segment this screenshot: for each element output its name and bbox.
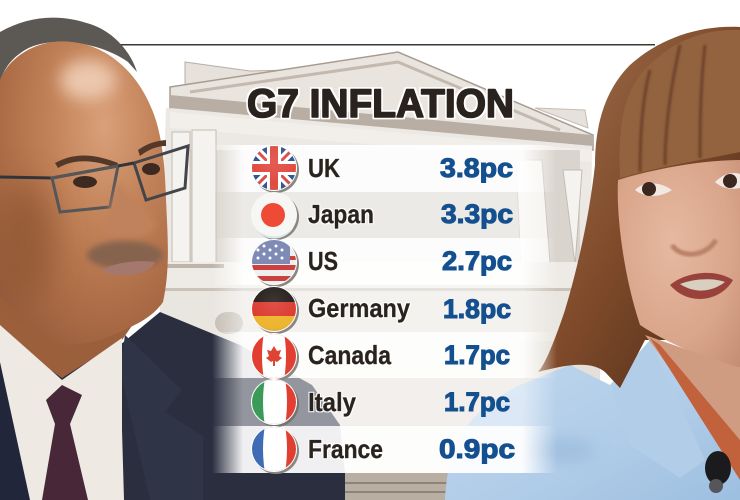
row: France — [251, 426, 515, 474]
row: Japan — [251, 192, 513, 240]
building: lower storey — [160, 291, 595, 341]
icon: Germany flag — [251, 286, 299, 334]
woman: scarf — [650, 338, 740, 480]
man: glasses — [0, 146, 188, 212]
label: Germany: Germany — [308, 293, 410, 323]
label: Italy: Italy — [308, 387, 356, 417]
building: columns — [172, 130, 582, 288]
row: UK — [251, 145, 513, 193]
man: lapel shadow — [120, 335, 203, 500]
icon: Italy flag — [251, 379, 299, 427]
row: Canada — [251, 333, 510, 380]
table: row bands — [212, 145, 557, 473]
woman: Rachel Reeves portrait — [445, 27, 740, 500]
woman: fringe strands — [640, 45, 705, 172]
row: US — [251, 239, 512, 287]
icon: France flag — [251, 426, 299, 474]
value: Japan: 3.3pc — [441, 199, 513, 229]
woman: jacket shade — [612, 340, 705, 478]
building: entablature — [170, 112, 592, 162]
label: US: US — [308, 246, 338, 276]
title: G7 INFLATION — [247, 82, 514, 126]
label: Canada: Canada — [308, 340, 391, 370]
value: US: 2.7pc — [442, 246, 512, 276]
value: Canada: 1.7pc — [444, 340, 510, 370]
man: jacket left — [0, 362, 30, 500]
woman: jacket — [445, 340, 740, 500]
woman: face — [618, 160, 740, 368]
top rule — [120, 44, 655, 46]
man: mouth — [100, 261, 155, 275]
man: suit — [0, 312, 345, 500]
building: pediment — [170, 52, 593, 150]
woman: eye left — [635, 183, 672, 196]
building: tympanum lines — [190, 62, 560, 130]
building: steps — [340, 473, 450, 500]
woman: hair back — [538, 27, 740, 388]
building: cornice — [170, 95, 592, 146]
man: tie — [42, 385, 88, 500]
building: balustrade — [162, 262, 592, 288]
icon: US flag — [251, 239, 299, 287]
man: forehead highlight — [60, 60, 116, 100]
man: neck — [0, 250, 150, 378]
value: Italy: 1.7pc — [444, 387, 510, 417]
man: hair — [0, 18, 137, 82]
value: UK: 3.8pc — [440, 153, 513, 183]
woman: mouth — [670, 273, 733, 299]
value: France: 0.9pc — [439, 434, 515, 464]
man: nose — [106, 180, 156, 237]
icon: Japan flag — [251, 192, 299, 240]
building: portico interior — [180, 150, 580, 280]
man: head — [0, 41, 168, 345]
man: shirt — [0, 325, 124, 500]
label: Japan: Japan — [308, 199, 374, 229]
man: eyes — [73, 176, 97, 188]
row: Germany — [251, 286, 511, 334]
man: cheek shading — [0, 180, 55, 300]
woman: neck — [645, 335, 740, 470]
label: UK: UK — [308, 153, 340, 183]
building: attic blocks — [185, 62, 588, 128]
woman: eye right — [715, 173, 740, 189]
icon: UK flag — [251, 145, 299, 193]
icon: Canada flag — [251, 333, 299, 380]
building: facade — [160, 108, 600, 500]
man: eyebrows — [55, 155, 118, 168]
man: Andrew Bailey portrait — [0, 18, 345, 500]
label: France: France — [308, 434, 383, 464]
woman: nose shadow — [672, 240, 716, 254]
building: Bank of England illustration — [160, 52, 600, 500]
value: Germany: 1.8pc — [443, 294, 511, 324]
woman: lapel microphone — [705, 451, 731, 493]
row: Italy — [251, 379, 510, 427]
woman: fringe — [620, 30, 740, 178]
man: moustache shadow — [87, 241, 163, 269]
